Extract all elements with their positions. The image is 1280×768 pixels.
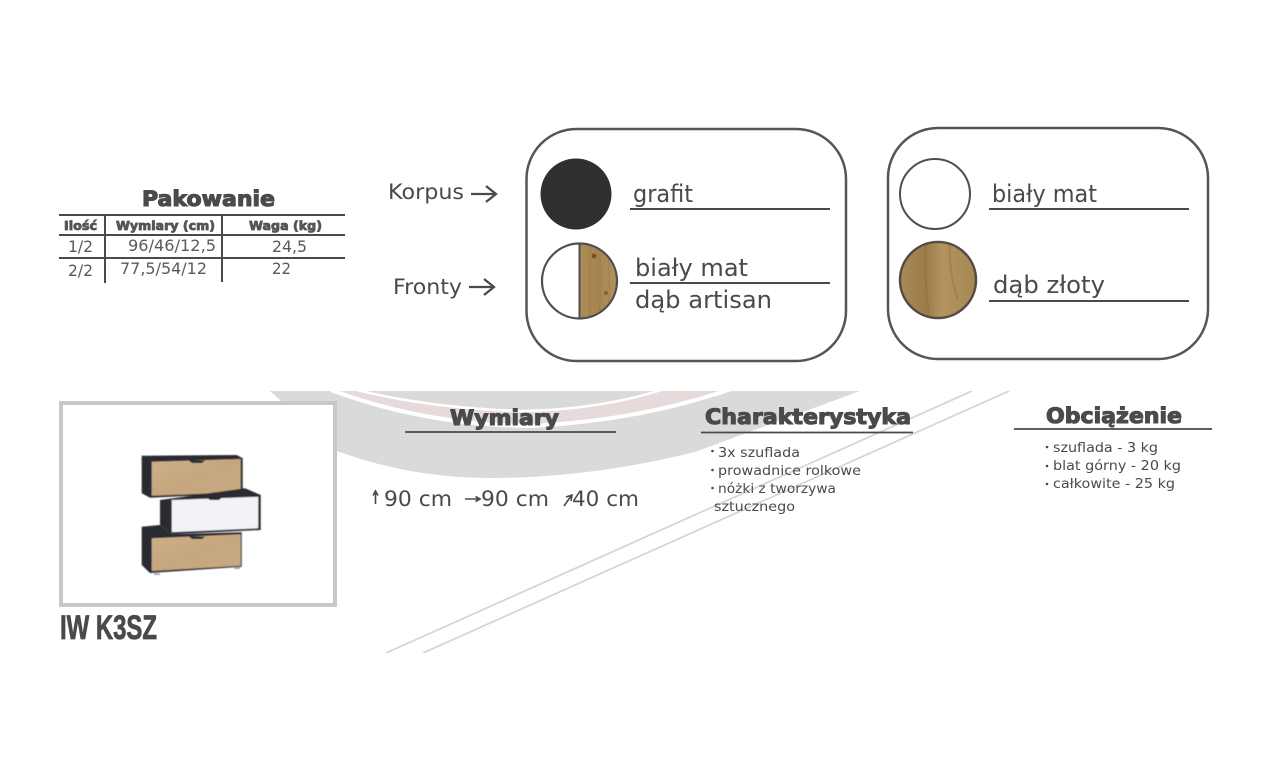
width: 90 cm [481,487,549,511]
panel: packing table [59,187,345,283]
table row 1: 96/46/12,5 [128,236,216,255]
feature list [711,445,861,515]
panel: finish option 2 [888,128,1208,359]
section: Wymiary [373,406,639,511]
section: Charakterystyka [701,405,913,515]
feature list: prowadnice rolkowe [718,463,861,479]
table header row [64,219,322,233]
label: Fronty with arrow: Fronty [393,275,462,299]
panel outline [888,128,1208,359]
table header row: Wymiary (cm) [116,219,215,233]
table row 2: 22 [272,259,291,278]
table row 2 [68,259,291,280]
heading: Pakowanie: Pakowanie [142,187,275,211]
table header row: Ilość [64,219,97,233]
label: biały mat: biały mat [992,180,1097,208]
load list: całkowite - 25 kg [1053,476,1175,492]
table row 1: 24,5 [272,237,307,256]
table row 1 [68,236,307,256]
label: Korpus with arrow: Korpus [388,180,464,204]
feature list: sztucznego [714,499,795,515]
top drawer [142,455,243,498]
load list: blat górny - 20 kg [1053,458,1181,474]
label: biały mat: biały mat [635,254,748,282]
label: dąb artisan: dąb artisan [635,286,772,314]
product image frame [61,403,335,605]
label: dąb złoty: dąb złoty [993,271,1105,299]
heading: Wymiary: Wymiary [450,406,559,430]
middle drawer [160,488,261,534]
label: Korpus with arrow [388,180,496,204]
section: Obciążenie [1014,404,1212,492]
label: Fronty with arrow [393,275,494,299]
load list: szuflada - 3 kg [1053,440,1158,456]
table row 2: 2/2 [68,261,93,280]
depth: 40 cm [572,487,639,511]
background decoration: grey swoosh and diagonal lines [270,387,1009,653]
underlines [989,209,1189,301]
heading: Charakterystyka: Charakterystyka [705,405,911,429]
feature list: 3x szuflada [718,445,800,461]
height: 90 cm [384,487,452,511]
swatch: grafit [540,158,612,230]
label: grafit: grafit [633,180,693,208]
swatch: white and artisan oak [542,243,618,319]
feature list: nóżki z tworzywa [718,481,836,497]
panel: finish option 1 [526,129,846,361]
table header row: Waga (kg) [249,219,322,233]
table row 2: 77,5/54/12 [120,259,207,278]
load list [1046,440,1181,492]
table row 1: 1/2 [68,237,93,256]
underlines [630,209,830,283]
bottom drawer [142,525,242,575]
swatch: dąb złoty [900,242,976,318]
heading: Obciążenie: Obciążenie [1046,404,1182,428]
product code: IW K3SZ [60,609,157,647]
swatch: biały mat [900,159,970,229]
illustration: chest of three drawers [142,455,261,575]
table rules [59,215,345,283]
panel outline [526,129,846,361]
